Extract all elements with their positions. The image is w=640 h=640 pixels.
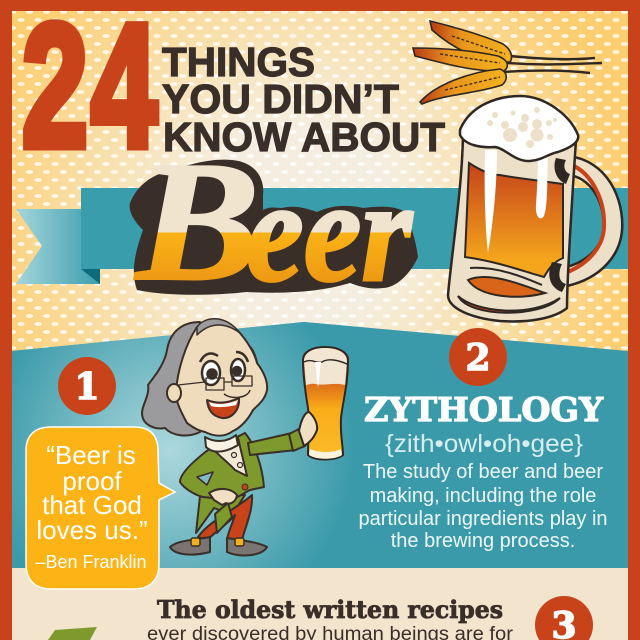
icon: green shape [48,627,97,640]
glasses [178,376,252,390]
definition text: particular ingredients play in [358,508,608,530]
foam [460,96,578,161]
pint drip [315,362,321,388]
mug glass [448,135,576,321]
mug handle [562,165,613,277]
title text: YOU DIDN’T [162,76,399,122]
mug base details [458,268,560,313]
title text: KNOW ABOUT [163,114,445,160]
shoe buckles [191,538,244,546]
quote bubble: “Beer is [46,440,136,470]
script word Beer [130,127,418,317]
teal panel glow [12,322,370,568]
shirt [212,438,247,476]
top hair [197,319,240,335]
cuff [289,429,305,451]
number badge 2 [449,328,507,386]
number badge 2: 2 [465,337,491,379]
foam bubbles [487,107,557,148]
number badge 1: 1 [74,366,100,408]
shoes [170,537,267,555]
waist hand [209,489,237,505]
cream panel [12,568,628,640]
definition text: making, including the role [370,485,596,507]
hair [142,322,205,435]
quote bubble: –Ben Franklin [35,552,147,572]
script word Beer: eer [246,152,413,312]
zythology heading: ZYTHOLOGY [364,390,603,429]
definition text: The study of beer and beer [363,461,603,483]
mug knuckles [549,158,570,292]
quote bubble: loves us.” [36,515,148,545]
jacket tail [196,495,245,533]
foam drips [485,150,548,253]
title text: THINGS [162,39,315,85]
mouth [207,398,239,418]
quote bubble [26,427,175,589]
dotted retro background [12,11,628,356]
pint bottom [309,449,342,459]
quote bubble: proof [62,466,122,496]
icon: wheat [413,21,602,104]
eyes [202,359,245,385]
title text [162,39,445,160]
collar [205,435,238,452]
shirt buttons [232,452,242,468]
nose [224,390,250,397]
ribbon banner [16,188,628,284]
number badge 1 [58,357,116,415]
illustration: Ben Franklin [142,319,305,555]
center tail [215,503,232,533]
mug beer [465,163,563,277]
foam line [304,360,347,364]
hand [299,412,317,446]
legs [198,495,252,540]
jacket [180,433,264,500]
icon: pint of beer [299,347,348,460]
teeth [209,400,238,407]
ear [167,384,181,402]
right hair [248,345,258,380]
jacket button [242,484,248,490]
arm gap [197,472,213,485]
pronunciation: {zith•owl•oh•gee} [385,430,583,458]
script word Beer: B [134,127,260,317]
fact 3 heading: The oldest written recipes [157,595,503,624]
pint foam [304,348,347,385]
definition text: the brewing process. [391,530,575,552]
icon: beer mug [448,96,613,321]
number badge 3 [535,596,593,640]
brows [200,352,248,362]
definition text [358,461,608,552]
raised arm [248,433,296,455]
head [176,321,267,436]
teal panel [12,322,628,568]
quote bubble: that God [42,490,142,520]
